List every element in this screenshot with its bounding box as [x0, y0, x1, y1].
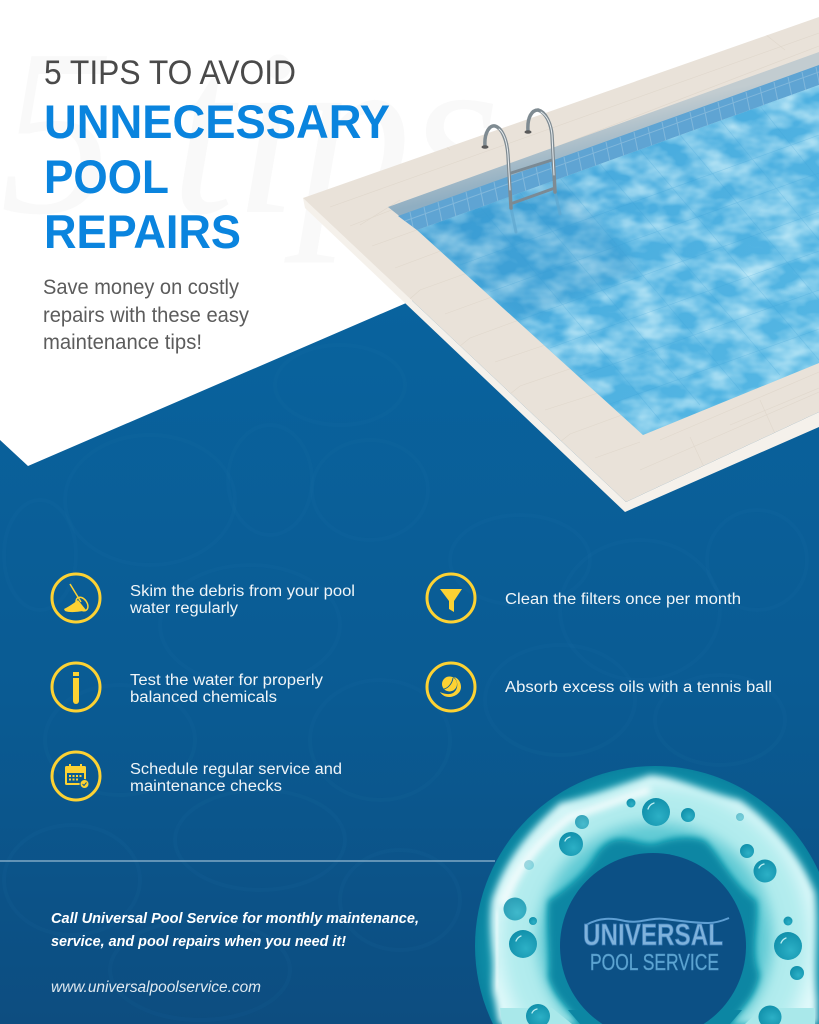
title: 5 TIPS TO AVOID — [44, 54, 296, 92]
ring inner shadow bottom fill — [568, 1010, 742, 1024]
pool photo — [303, 17, 819, 512]
subtitle: repairs with these easy — [43, 304, 249, 327]
pool ladder — [482, 110, 560, 232]
tip: clean filters: Clean the filters once per month — [505, 591, 741, 608]
tip: skim debris — [52, 574, 355, 622]
website url: www.universalpoolservice.com — [51, 979, 261, 996]
ring tube — [490, 775, 817, 1024]
tip: skim debris: water regularly — [129, 600, 238, 617]
title: POOL — [44, 150, 169, 203]
pool deck surface — [303, 17, 819, 502]
subtitle: Save money on costly — [43, 276, 239, 299]
tip: clean filters — [427, 574, 741, 622]
tip: test water: balanced chemicals — [130, 689, 277, 706]
pool water — [400, 80, 819, 440]
subtitle: maintenance tips! — [43, 331, 202, 354]
icon: funnel filter — [427, 574, 475, 622]
icon: tennis ball — [427, 663, 475, 711]
watermark script: 5 tips: 5 tips — [0, 1, 500, 264]
icon: test tube — [52, 663, 100, 711]
divider line — [0, 860, 495, 862]
call to action: service, and pool repairs when you need it! — [51, 933, 346, 950]
inflatable ring with logo — [475, 766, 819, 1024]
ring inner shadow — [549, 839, 758, 1024]
title — [44, 54, 390, 258]
title: UNNECESSARY — [44, 95, 390, 148]
icon: calendar — [52, 752, 100, 800]
tip: schedule service — [52, 752, 342, 800]
tip: tennis ball: Absorb excess oils with a tennis ball — [505, 679, 772, 696]
logo: Universal Pool Service — [583, 917, 729, 975]
logo: Universal Pool Service: UNIVERSAL — [583, 917, 723, 952]
icon: pool skimmer — [52, 574, 100, 622]
tip: test water — [52, 663, 323, 711]
subtitle — [43, 276, 249, 354]
tip: schedule service: Schedule regular service and — [130, 761, 342, 778]
logo: Universal Pool Service: POOL SERVICE — [590, 949, 719, 975]
call to action — [51, 910, 419, 950]
tip: tennis ball — [427, 663, 772, 711]
ring bubbles — [504, 798, 804, 1024]
pool wall: grey band and tile — [388, 52, 819, 232]
tip: schedule service: maintenance checks — [130, 778, 282, 795]
tip: skim debris: Skim the debris from your pool — [130, 583, 355, 600]
title: REPAIRS — [44, 205, 241, 258]
tip: test water: Test the water for properly — [130, 672, 323, 689]
ring tube bottom fill — [500, 1008, 815, 1024]
call to action: Call Universal Pool Service for monthly maintenance, — [51, 910, 419, 927]
pool deck front edge — [303, 198, 819, 512]
